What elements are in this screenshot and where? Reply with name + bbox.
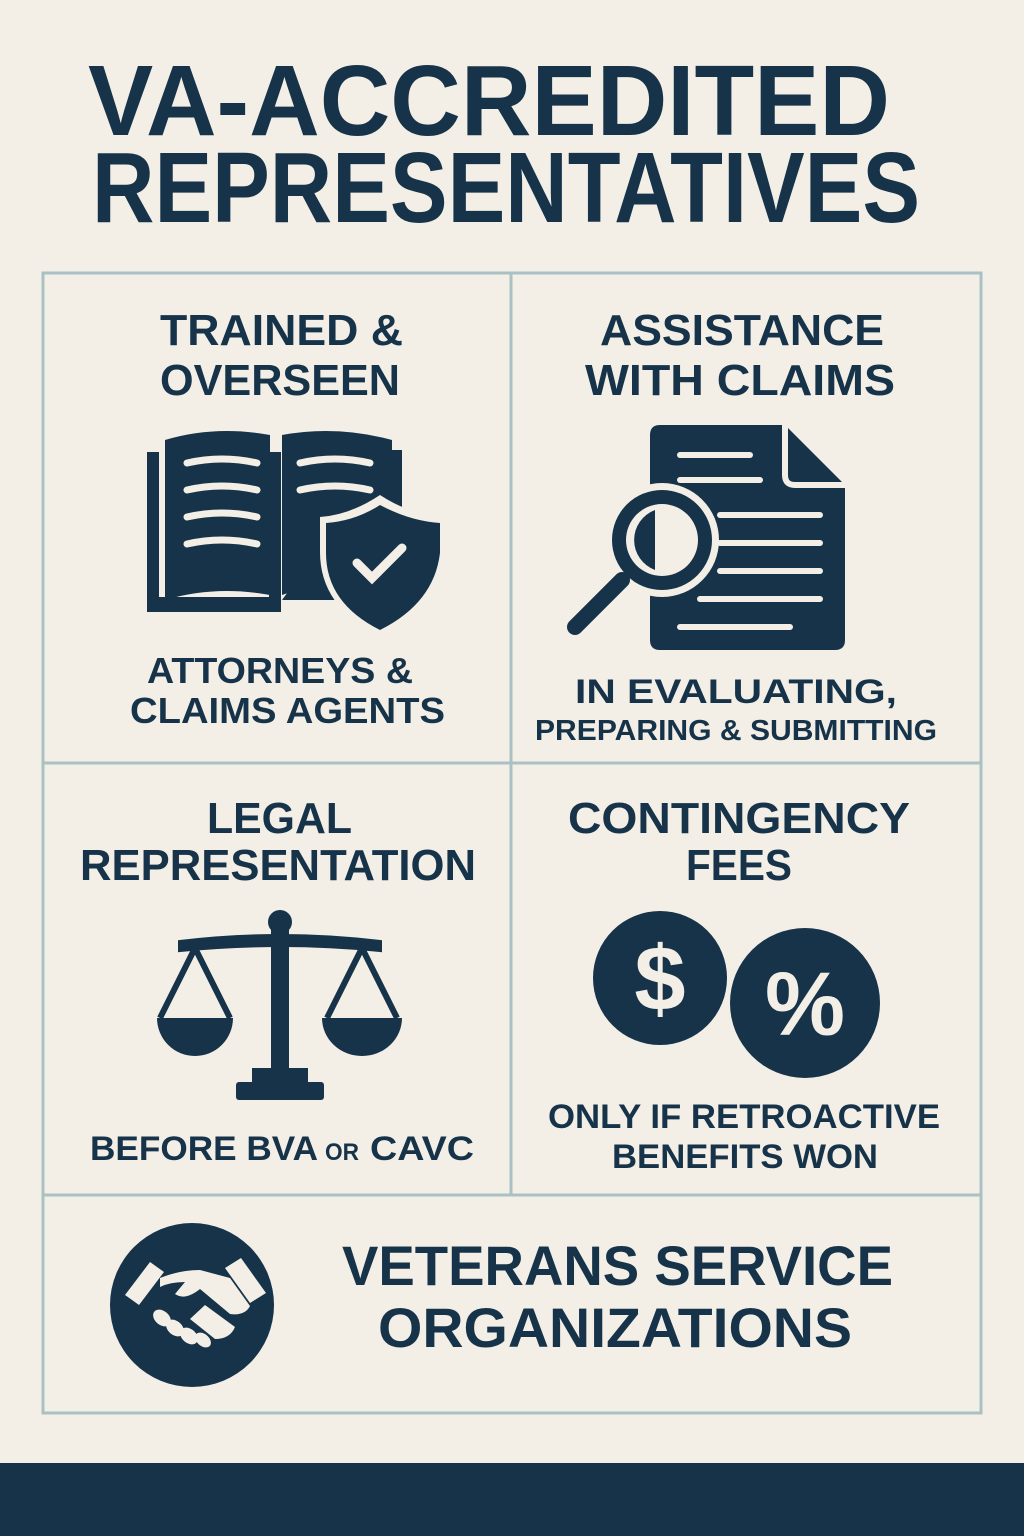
panel: contingency fees: FEES bbox=[686, 841, 792, 890]
grid frame bbox=[43, 273, 981, 1413]
panel: assistance with claims: PREPARING & SUBMITTING bbox=[535, 715, 937, 747]
panel: contingency fees: BENEFITS WON bbox=[612, 1138, 878, 1176]
title: REPRESENTATIVES bbox=[92, 132, 920, 244]
panel: trained & overseen: ATTORNEYS & bbox=[147, 650, 413, 691]
footer band bbox=[0, 1463, 1024, 1536]
icon: document with magnifier bbox=[575, 425, 845, 650]
panel: trained & overseen: OVERSEEN bbox=[160, 356, 400, 405]
icon: dollar and percent coins: % bbox=[765, 955, 845, 1055]
title bbox=[88, 45, 920, 244]
icon: scales of justice bbox=[157, 910, 402, 1100]
panel: legal representation: LEGAL bbox=[207, 794, 352, 843]
panel: contingency fees: CONTINGENCY bbox=[568, 794, 910, 843]
panel: trained & overseen bbox=[130, 306, 446, 731]
panel: veterans service organizations: ORGANIZATIONS bbox=[378, 1296, 852, 1359]
panel: legal representation: OR bbox=[325, 1139, 359, 1166]
panel: assistance with claims: ASSISTANCE bbox=[600, 306, 884, 355]
panel: legal representation bbox=[80, 794, 476, 1168]
panel: legal representation: CAVC bbox=[370, 1130, 474, 1168]
panel: legal representation: REPRESENTATION bbox=[80, 841, 476, 890]
panel: veterans service organizations bbox=[110, 1223, 893, 1387]
panel: assistance with claims: WITH CLAIMS bbox=[585, 356, 895, 405]
icon: dollar and percent coins bbox=[593, 911, 885, 1083]
panel: trained & overseen: CLAIMS AGENTS bbox=[130, 690, 445, 731]
title: VA-ACCREDITED bbox=[88, 45, 890, 157]
panel: contingency fees: ONLY IF RETROACTIVE bbox=[548, 1098, 940, 1136]
panel: contingency fees bbox=[548, 794, 940, 1176]
icon: dollar and percent coins: $ bbox=[634, 928, 686, 1030]
panel: assistance with claims: IN EVALUATING, bbox=[575, 673, 897, 711]
icon: book with shield bbox=[147, 431, 446, 637]
panel: trained & overseen: TRAINED & bbox=[160, 306, 403, 355]
panel: assistance with claims bbox=[535, 306, 937, 747]
panel: veterans service organizations: VETERANS SERVICE bbox=[342, 1234, 893, 1297]
panel: legal representation: BEFORE BVA bbox=[90, 1130, 318, 1168]
icon: handshake bbox=[110, 1223, 274, 1387]
